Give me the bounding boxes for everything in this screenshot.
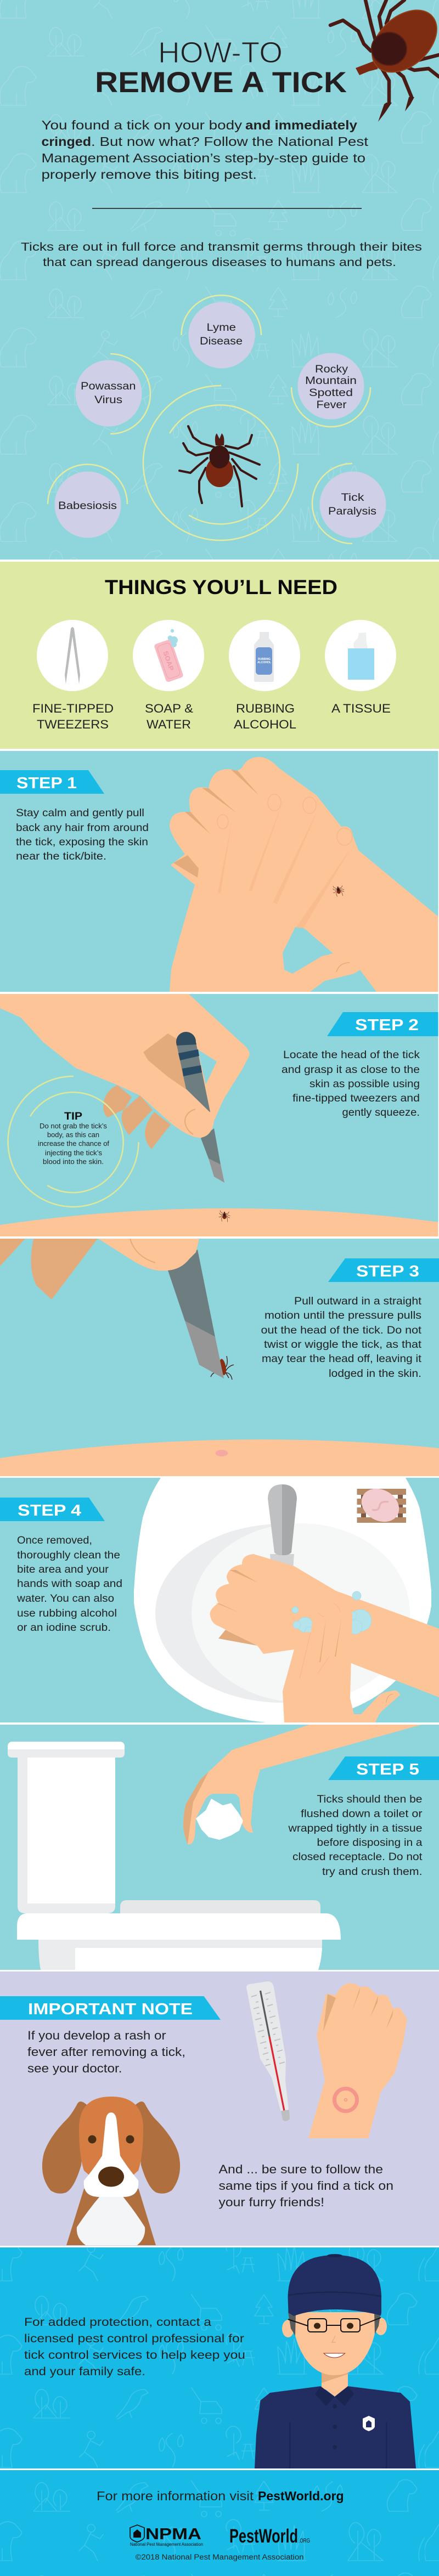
callout: tip: blood into the skin. (43, 1158, 104, 1166)
banner: step 5: STEP 5 (356, 1761, 419, 1778)
text block: ticks transmit germs: that can spread dangerous diseases to humans and pets. (43, 256, 396, 269)
text block: intro paragraph: Management Association’s step-by-step guide to (42, 151, 365, 165)
illustration: hand dropping tissue (183, 1725, 421, 1844)
disease: Rocky Mountain Spotted Fever (291, 353, 370, 427)
icon: thermometer (246, 1981, 290, 2121)
text block: step 5: flushed down a toilet or (301, 1808, 423, 1820)
panel: step 1 (0, 751, 439, 992)
text block: step 5: wrapped tightly in a tissue (288, 1822, 423, 1834)
panel: step 5 (0, 1725, 439, 1970)
illustration: dog (42, 2097, 180, 2245)
text block: step 4: or an iodine scrub. (17, 1622, 111, 1634)
panel: professional (0, 2247, 439, 2468)
icon: tweezers (176, 1032, 224, 1183)
logo: NPMA: National Pest Management Association (130, 2542, 203, 2547)
icon: soap dish (356, 1482, 406, 1528)
banner: step 3 (328, 1258, 439, 1282)
text: more information: PestWorld.org (258, 2489, 344, 2503)
text: more information (97, 2489, 344, 2503)
text block: furry friends: your furry friends! (218, 2195, 324, 2209)
disease: Lyme Disease: Disease (200, 336, 243, 347)
text block: see your doctor: fever after removing a tick, (27, 2045, 185, 2059)
text block: ticks transmit germs (21, 241, 422, 269)
panel: step 2 (0, 994, 439, 1236)
text block: step 5 (288, 1793, 423, 1878)
text block: added protection: tick control services to help keep you (24, 2349, 245, 2362)
text block: see your doctor (27, 2029, 185, 2075)
text block: step 2: and grasp it as close to the (282, 1064, 420, 1076)
text block: step 5: try and crush them. (322, 1866, 423, 1878)
text block: step 3: may tear the head off, leaving it (262, 1353, 422, 1365)
text block: step 5: closed receptacle. Do not (292, 1851, 423, 1863)
text block: step 3 (261, 1295, 422, 1380)
text block: see your doctor: see your doctor. (27, 2061, 122, 2075)
item: rubbing alcohol: ALCOHOL (257, 661, 272, 664)
banner: important note (0, 1996, 221, 2020)
text block: step 2: skin as possible using (309, 1078, 420, 1090)
illustration: hand holding tweezers (0, 994, 250, 1183)
banner: step 5 (328, 1756, 439, 1780)
logo: NPMA: NPMA (145, 2526, 201, 2543)
item: soap and water: SOAP & (145, 702, 193, 715)
item: rubbing alcohol: ALCOHOL (234, 718, 296, 731)
text block: furry friends (218, 2162, 393, 2209)
disease: Rocky Mountain Spotted Fever: Fever (316, 399, 347, 411)
callout: tip: injecting the tick’s (45, 1149, 102, 1157)
text block: step 4: thoroughly clean the (17, 1549, 120, 1561)
text block: step 1: the tick, exposing the skin (16, 836, 148, 848)
text block: step 5: Ticks should then be (317, 1793, 423, 1805)
disease: Powassan Virus (76, 354, 150, 434)
text block: step 1: near the tick/bite. (16, 850, 106, 862)
title: HOW-TO (158, 36, 283, 69)
disease: Tick Paralysis: Tick (341, 492, 364, 504)
text block: intro paragraph: . But now what? Follow the National Pest (91, 134, 369, 149)
disease: Tick Paralysis (312, 464, 386, 544)
item: rubbing alcohol (229, 620, 300, 731)
text: more information: For more information visit (97, 2489, 254, 2503)
panel: footer (0, 2470, 439, 2576)
text block: added protection: For added protection, contact a (24, 2316, 211, 2329)
callout: tip: body, as this can (47, 1131, 99, 1139)
logo: NPMA (130, 2525, 203, 2547)
icon: soap bubbles (292, 1591, 372, 1637)
illustration: sink (134, 1478, 431, 1722)
text block: furry friends: And ... be sure to follow the (218, 2162, 383, 2176)
illustration: pest control professional (255, 2254, 416, 2468)
illustration: tweezers pulling tick out (0, 1239, 234, 1380)
item: tissue: A TISSUE (331, 702, 391, 715)
item: tweezers (32, 620, 114, 731)
illustration: skin with bite mark (0, 1439, 439, 1476)
illustration: skin with tick (0, 1208, 439, 1236)
text block: step 4: use rubbing alcohol (17, 1607, 117, 1619)
disease: Powassan Virus: Powassan (81, 381, 136, 392)
icon: small tick on arm (332, 884, 345, 897)
text block: step 2: gently squeeze. (342, 1106, 420, 1118)
item: tweezers: TWEEZERS (37, 718, 109, 731)
item: soap and water: WATER (147, 718, 191, 731)
panel: things you'll need (0, 562, 439, 749)
icon: faucet (268, 1484, 297, 1569)
banner: step 2: STEP 2 (355, 1016, 419, 1034)
callout: tip: TIP (64, 1111, 82, 1122)
text block: intro paragraph (42, 118, 369, 182)
item: tweezers: FINE-TIPPED (32, 702, 114, 715)
disease: Rocky Mountain Spotted Fever: Rocky (315, 364, 348, 375)
disease: Rocky Mountain Spotted Fever: Mountain (305, 375, 357, 387)
text block: step 4: Once removed, (17, 1534, 92, 1546)
panel: step 4 (0, 1478, 439, 1722)
banner: important note: IMPORTANT NOTE (28, 2001, 193, 2018)
icon: shirt badge (363, 2416, 375, 2431)
text block: furry friends: same tips if you find a tick on (218, 2179, 393, 2193)
banner: step 1 (0, 770, 104, 794)
text block: intro paragraph: cringed (42, 134, 91, 149)
text block: intro paragraph: properly remove this biting pest. (42, 167, 257, 182)
icon: wrist with bullseye rash (308, 1983, 407, 2138)
title (95, 36, 347, 99)
illustration: toilet (8, 1742, 341, 1970)
heading: things you'll need: THINGS YOU’LL NEED (105, 576, 337, 598)
banner: step 1: STEP 1 (16, 775, 77, 792)
icon: crumpled tissue (196, 1799, 243, 1840)
text block: step 3: lodged in the skin. (329, 1368, 421, 1380)
callout: tip (8, 1076, 138, 1207)
text block: step 4: bite area and your (17, 1563, 109, 1575)
logo: PestWorld: PestWorld (229, 2526, 298, 2547)
panel: step 3 (0, 1239, 439, 1476)
illustration: washing hands (210, 1554, 439, 1722)
icon: tick in tweezers (211, 1356, 234, 1380)
banner: step 2 (327, 1012, 439, 1036)
text block: intro paragraph: and immediately (245, 118, 357, 132)
text block: step 2 (282, 1049, 420, 1118)
text block: step 1 (16, 807, 149, 862)
banner: step 4: STEP 4 (18, 1502, 81, 1519)
disease: Powassan Virus: Virus (94, 394, 122, 406)
text block: step 4 (16, 1534, 122, 1634)
text block: step 2: fine-tipped tweezers and (292, 1092, 420, 1104)
disease: Babesiosis: Babesiosis (58, 500, 117, 512)
text block: added protection: and your family safe. (24, 2365, 145, 2378)
panel: important note (0, 1971, 439, 2246)
text block: step 3: out the head of the tick. Do not (261, 1324, 422, 1336)
item: rubbing alcohol: RUBBING (236, 702, 295, 715)
disease: Tick Paralysis: Paralysis (328, 506, 376, 517)
text block: step 3: twist or wiggle the tick, as that (264, 1338, 422, 1351)
chart: central tick with rings (143, 386, 298, 540)
text block: step 4: hands with soap and (17, 1578, 122, 1590)
text block: added protection (24, 2316, 245, 2378)
callout: tip: increase the chance of (38, 1140, 110, 1148)
disease: Lyme Disease (181, 295, 261, 369)
item: rubbing alcohol: RUBBING (258, 658, 271, 661)
text block: step 5: before disposing in a (317, 1837, 423, 1849)
text block: step 1: back any hair from around (16, 822, 149, 834)
illustration: hand pulling back hair on arm (170, 757, 439, 992)
item: tissue (325, 620, 396, 715)
logo: PestWorld: .ORG (299, 2538, 310, 2544)
text block: step 4: water. You can also (16, 1592, 114, 1605)
text: copyright: ©2018 National Pest Management Association (135, 2553, 304, 2561)
icon: large tick, top right (330, 0, 439, 122)
banner: step 4 (0, 1498, 105, 1521)
text block: step 1: Stay calm and gently pull (16, 807, 144, 819)
text block: step 3: Pull outward in a straight (294, 1295, 422, 1307)
item: soap and water: SOAP (161, 650, 176, 671)
disease: Lyme Disease: Lyme (206, 322, 236, 334)
disease: Rocky Mountain Spotted Fever: Spotted (309, 387, 353, 399)
disease: Babesiosis (48, 464, 127, 538)
text block: step 2: Locate the head of the tick (283, 1049, 420, 1061)
text block: ticks transmit germs: Ticks are out in full force and transmit germs through their bites (21, 241, 422, 253)
text block: added protection: licensed pest control professional for (24, 2332, 244, 2345)
text block: see your doctor: If you develop a rash or (27, 2029, 166, 2042)
panel: intro (0, 0, 439, 560)
text block: step 3: motion until the pressure pulls (264, 1309, 421, 1321)
text block: intro paragraph: You found a tick on your body (42, 118, 243, 132)
item: soap and water (133, 620, 204, 731)
banner: step 3: STEP 3 (356, 1263, 419, 1280)
title: REMOVE A TICK (95, 66, 347, 99)
callout: tip: Do not grab the tick’s (40, 1122, 107, 1130)
